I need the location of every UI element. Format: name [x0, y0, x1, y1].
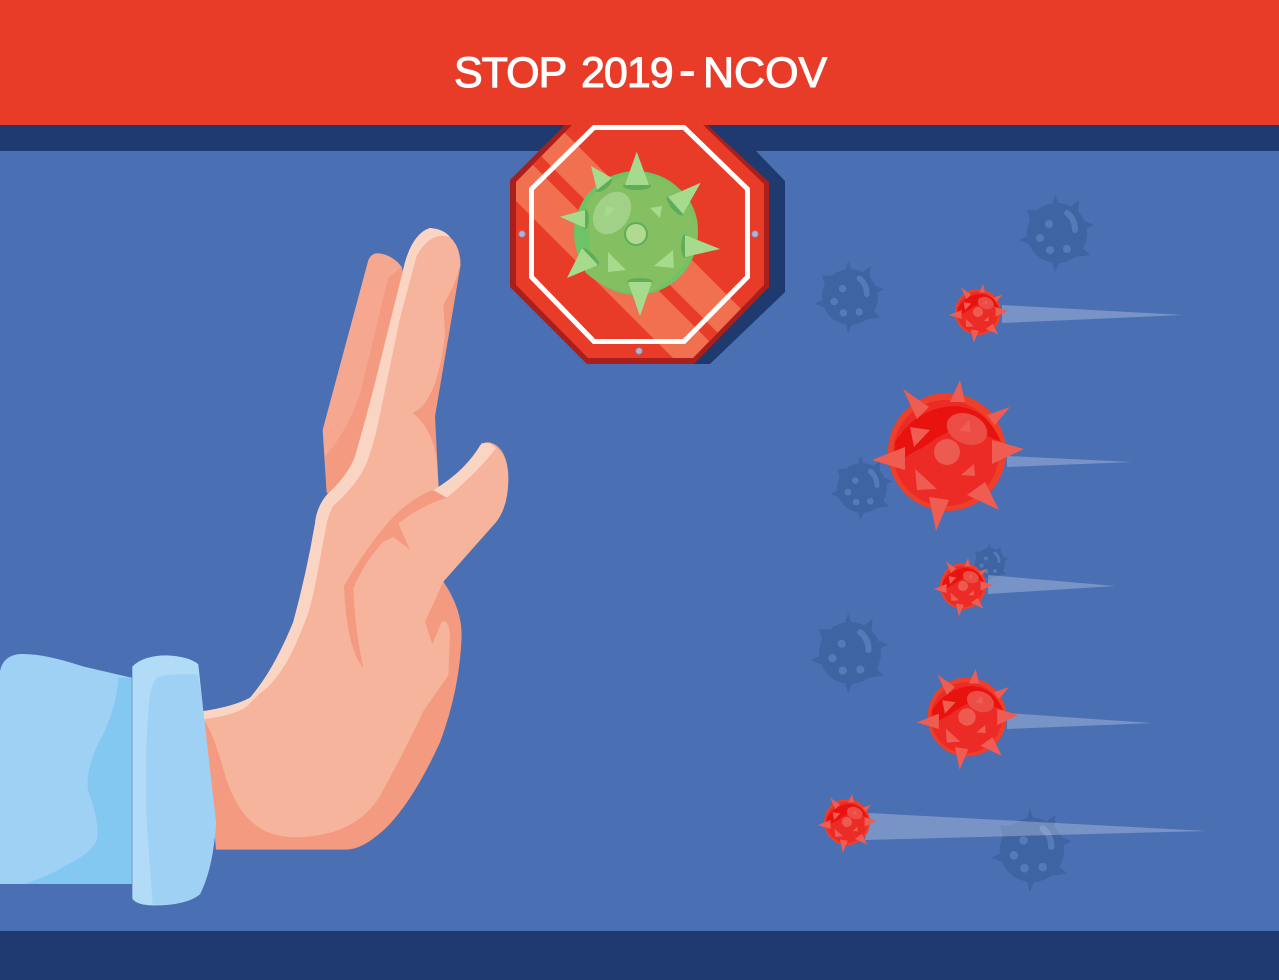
sleeve shade	[23, 678, 132, 884]
title: STOP	[454, 49, 566, 97]
sign gloss band	[516, 132, 741, 358]
hand shadow	[203, 228, 508, 850]
palm crease	[344, 490, 447, 668]
sign face	[516, 125, 764, 358]
sleeve	[0, 654, 132, 884]
thumb nail	[433, 443, 496, 498]
sign shadow	[690, 125, 785, 364]
title: NCOV	[703, 49, 828, 97]
title: 2019	[581, 49, 673, 97]
hand and sleeve	[0, 228, 508, 905]
title: -	[679, 42, 696, 98]
background viruses	[811, 194, 1094, 892]
bottom navy band	[0, 931, 1279, 980]
motion trails	[865, 305, 1207, 840]
sign white frame	[532, 128, 748, 342]
header banner	[0, 0, 1279, 125]
back finger	[323, 253, 410, 497]
cuff inner	[146, 674, 216, 905]
hand highlight	[203, 228, 450, 719]
top navy band	[0, 124, 1279, 151]
stop sign	[510, 125, 785, 364]
cuff	[132, 655, 216, 905]
hand base	[203, 228, 508, 837]
red viruses	[818, 284, 1024, 853]
sign dark rim	[510, 125, 769, 364]
sign bolts	[519, 231, 758, 354]
green virus	[560, 152, 720, 316]
